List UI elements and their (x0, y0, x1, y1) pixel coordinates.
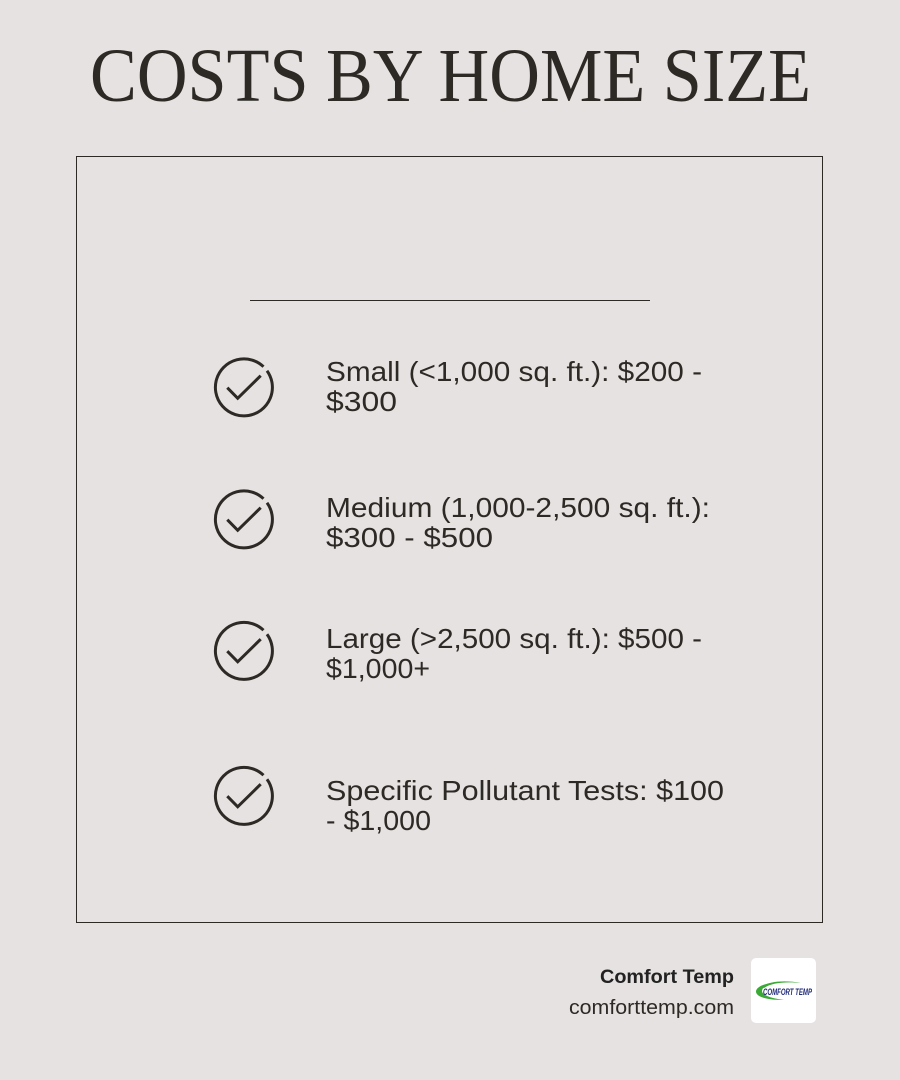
title: COSTS BY HOME SIZE (90, 34, 811, 118)
logo: Comfort Temp (751, 958, 816, 1023)
logo: Comfort Temp: COMFORT TEMP (763, 987, 813, 997)
text: large homes cost: Large (>2,500 sq. ft.): $500 - (326, 623, 702, 654)
list item: medium homes (215, 491, 710, 553)
icon: check circle (215, 622, 272, 679)
panel: cost list (76, 156, 822, 922)
text: small homes cost: Small (<1,000 sq. ft.): $200 - (326, 356, 702, 387)
icon: check circle (215, 491, 272, 548)
text: pollutant tests cost: Specific Pollutant Tests: $100 (326, 775, 724, 806)
text: small homes cost: $300 (326, 386, 397, 417)
list item: large homes (215, 622, 702, 684)
footer: brand name: Comfort Temp (600, 967, 734, 988)
icon: check circle (215, 359, 272, 416)
text: medium homes cost: Medium (1,000-2,500 sq. ft.): (326, 492, 710, 523)
icon: check circle (215, 767, 272, 824)
text: large homes cost: $1,000+ (326, 653, 430, 684)
list item: small homes (215, 356, 702, 417)
list item: pollutant tests (215, 767, 724, 836)
text: pollutant tests cost: - $1,000 (326, 805, 431, 836)
text: medium homes cost: $300 - $500 (326, 522, 493, 553)
footer: website: comforttemp.com (569, 997, 734, 1019)
